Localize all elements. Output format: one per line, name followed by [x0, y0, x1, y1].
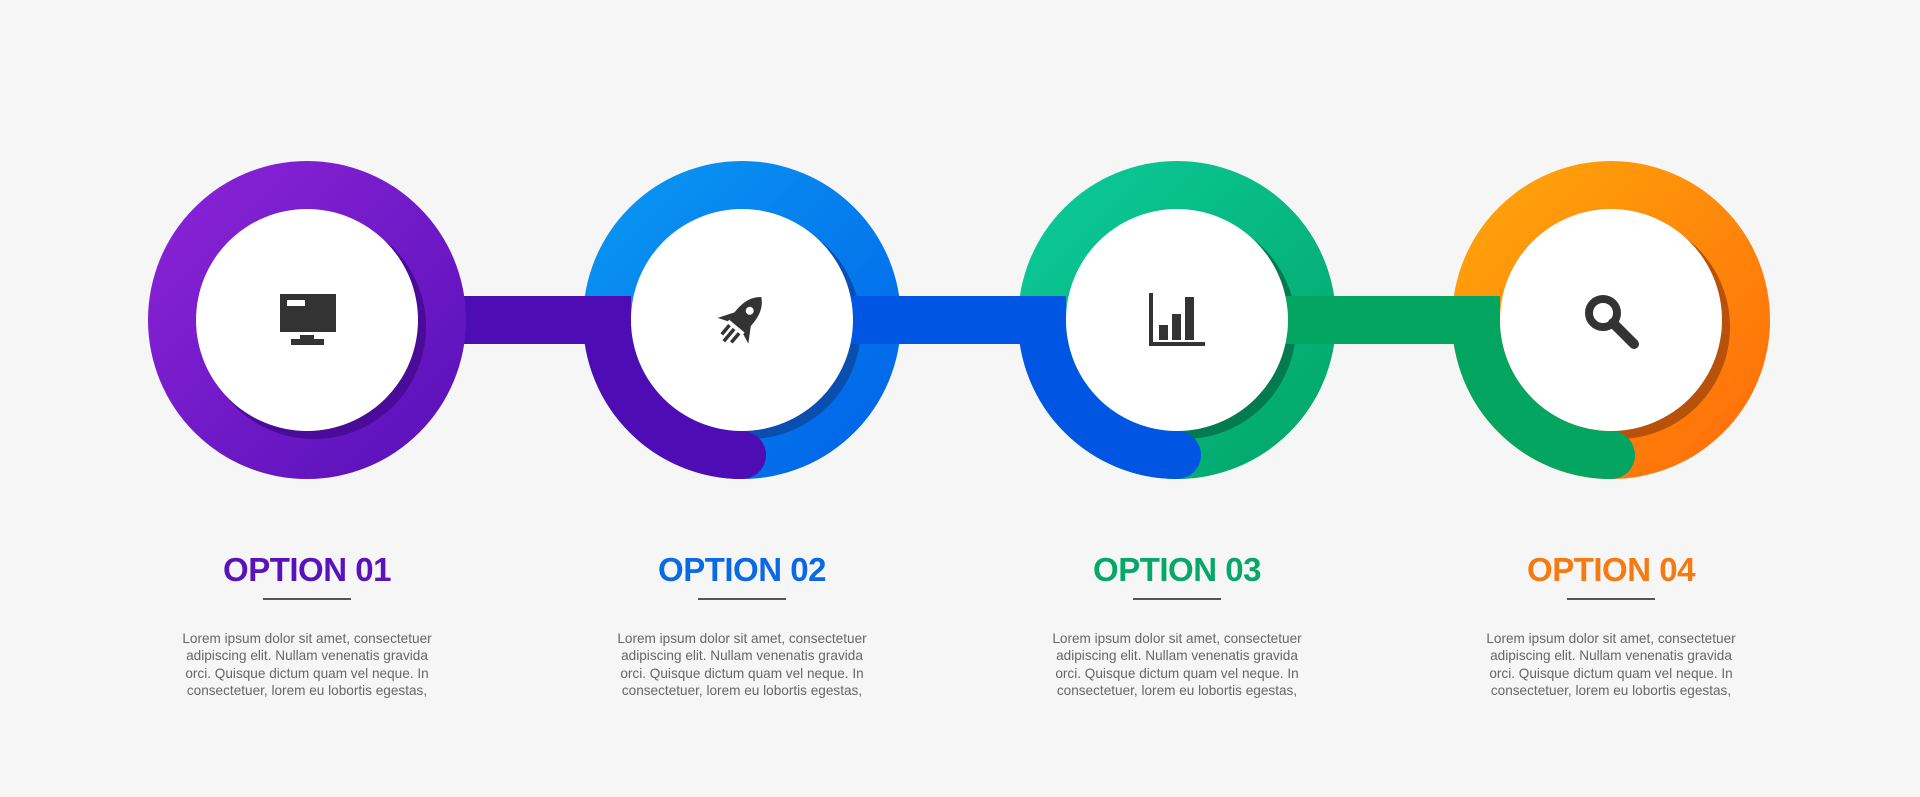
option 01 text: OPTION 01 [223, 551, 391, 588]
circle 2 ring [583, 161, 901, 479]
option 02 text: Lorem ipsum dolor sit amet, consectetuer adipiscing elit. Nullam venenatis gravida orci. Quisque dictum quam vel neque. In consectetuer, lorem eu lobortis egestas, [617, 631, 867, 698]
connector 2-3 [840, 320, 1177, 455]
icon: bar chart [1149, 293, 1205, 346]
connector 1-2 [400, 320, 742, 455]
option 04 text [1486, 551, 1736, 698]
circle 3 ring [1018, 161, 1336, 479]
option 03 text: OPTION 03 [1093, 551, 1261, 588]
white centers [196, 209, 1722, 431]
icon: rocket [709, 284, 777, 354]
circle 1 ring [148, 161, 466, 479]
icon: monitor [280, 294, 336, 345]
option 04 text: OPTION 04 [1527, 551, 1695, 588]
option 02 text [617, 551, 867, 698]
option 03 text [1052, 551, 1302, 698]
connector 3-4 [1275, 320, 1611, 455]
option 02 text: OPTION 02 [658, 551, 826, 588]
option 03 text: Lorem ipsum dolor sit amet, consectetuer adipiscing elit. Nullam venenatis gravida orci. Quisque dictum quam vel neque. In consectetuer, lorem eu lobortis egestas, [1052, 631, 1302, 698]
option 04 text: Lorem ipsum dolor sit amet, consectetuer adipiscing elit. Nullam venenatis gravida orci. Quisque dictum quam vel neque. In consectetuer, lorem eu lobortis egestas, [1486, 631, 1736, 698]
icon: magnifier [1589, 299, 1634, 344]
option 01 text: Lorem ipsum dolor sit amet, consectetuer adipiscing elit. Nullam venenatis gravida orci. Quisque dictum quam vel neque. In consectetuer, lorem eu lobortis egestas, [182, 631, 432, 698]
option 01 text [182, 551, 432, 698]
circle 4 ring [1452, 161, 1770, 479]
